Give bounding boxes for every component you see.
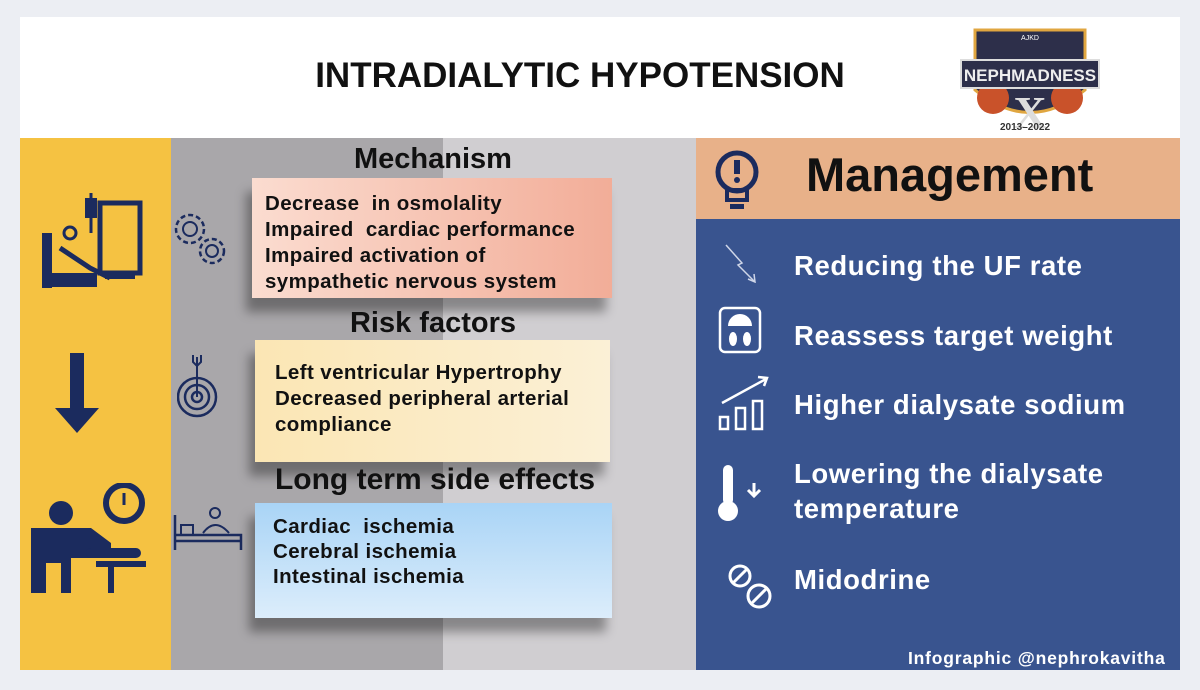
icon: thermometer [718,465,761,521]
icon: target [177,355,218,418]
left yellow strip [20,138,171,670]
heading: Management: Management [806,148,1093,201]
logo: nephmadness: NEPHMADNESS [964,66,1096,85]
box: long term side effects [255,503,612,618]
box: mechanism: Decrease in osmolality [265,192,502,215]
box: risk factors: Left ventricular Hypertrophy [275,361,562,384]
box: risk factors: compliance [275,413,392,436]
text: Higher dialysate sodium [794,389,1126,420]
management items: Reducing the UF rate [794,250,1083,281]
logo: nephmadness: AJKD [1021,35,1039,42]
heading: Mechanism: Mechanism [354,143,512,175]
text: temperature [794,493,960,524]
box: long term side effects: Cardiac ischemia [273,515,454,538]
title: INTRADIALYTIC HYPOTENSION [315,56,845,95]
icon: blood pressure [31,483,146,593]
management header [696,138,1180,219]
header panel [20,17,1180,138]
heading: Risk factors: Risk factors [350,307,516,339]
icon: lightbulb [716,150,758,209]
arrow: down [55,353,99,433]
icon: scale [718,306,762,354]
icon: hospital bed [174,507,242,550]
text: Reassess target weight [794,320,1113,351]
logo: nephmadness [960,28,1100,135]
box: risk factors [255,340,610,462]
box: mechanism: Impaired cardiac performance [265,218,575,241]
icon: bar chart up [718,376,769,430]
logo years: 2013–2022 [1000,122,1050,133]
box: mechanism: sympathetic nervous system [265,270,557,293]
box: mechanism [252,178,612,298]
icon: pills [728,564,772,608]
box: mechanism: Impaired activation of [265,244,486,267]
middle gray background [171,138,443,670]
icon: dialysis patient [42,193,142,288]
panel: management [696,138,1180,670]
credit: Infographic @nephrokavitha [908,648,1166,668]
text: Lowering the dialysate [794,458,1104,489]
icon: gears [174,214,226,264]
icon: lightning down [726,244,756,283]
box: risk factors: Decreased peripheral arterial [275,387,569,410]
box: long term side effects: Intestinal ischemia [273,565,464,588]
text: Midodrine [794,564,931,595]
box: long term side effects: Cerebral ischemia [273,540,456,563]
heading: Long term side effects: Long term side effects [275,463,595,496]
